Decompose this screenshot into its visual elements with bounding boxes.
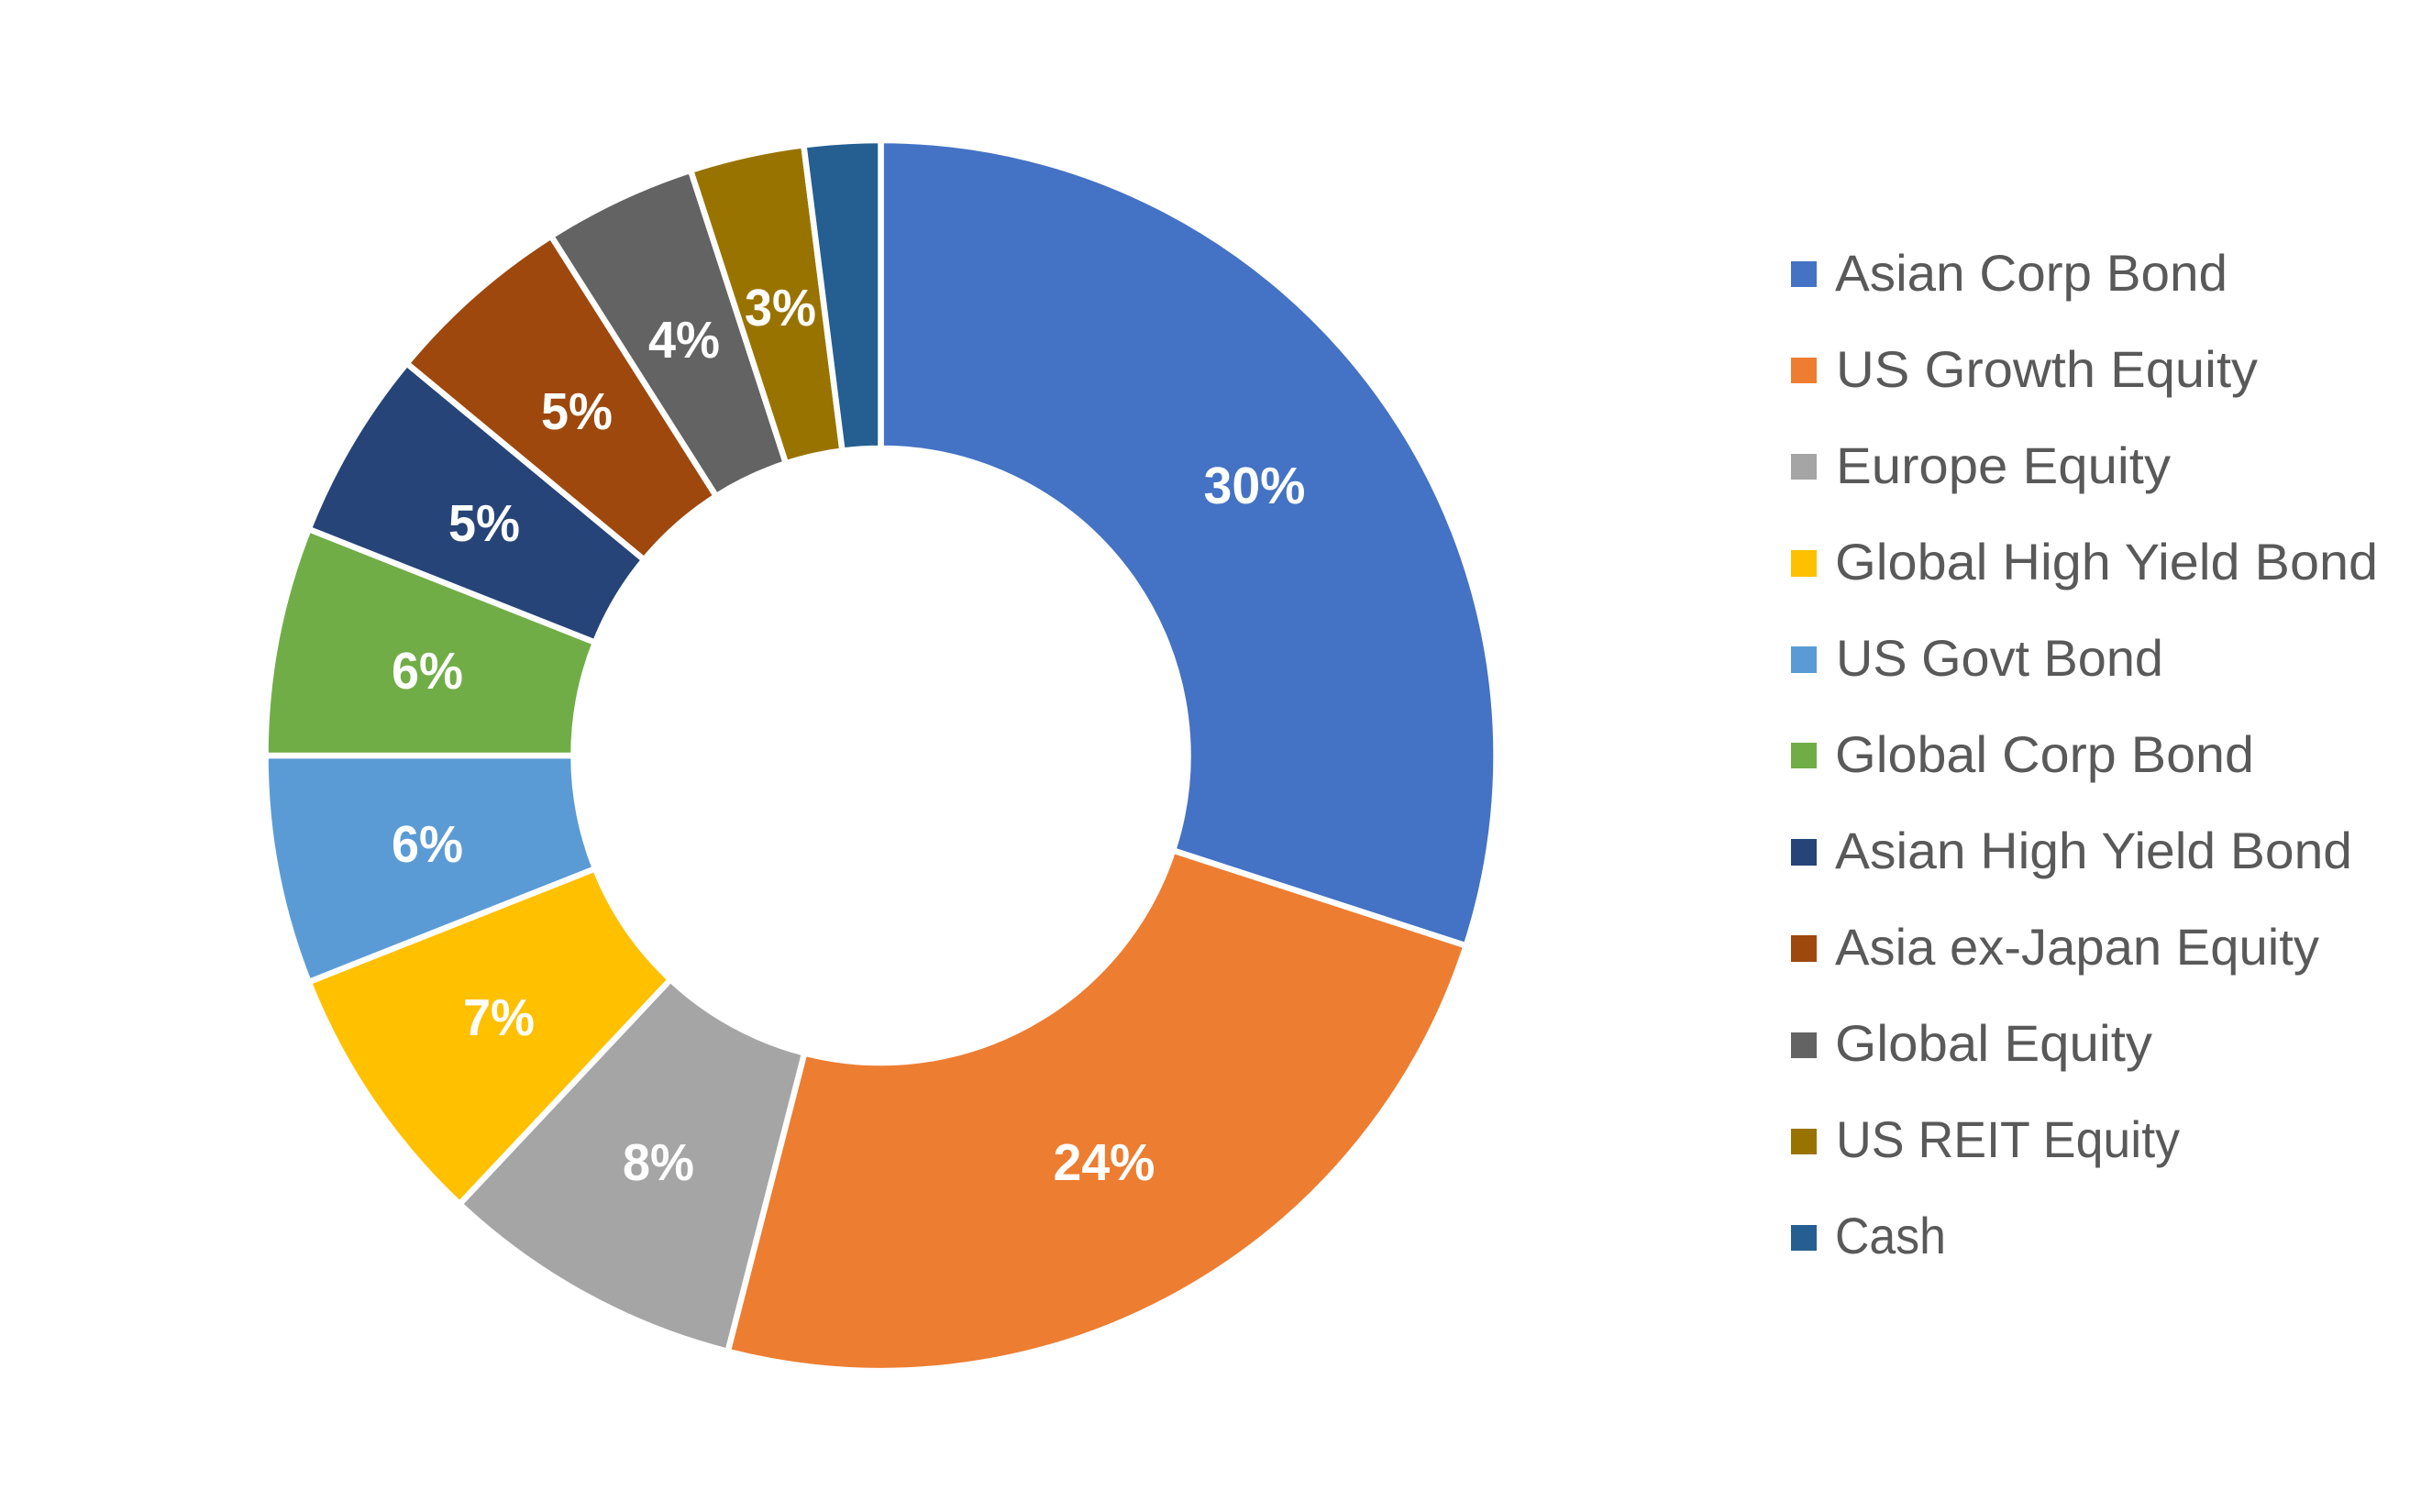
- legend item: US Govt Bond: US Govt Bond: [1836, 629, 2163, 687]
- value: 6% green: 6%: [392, 642, 463, 701]
- slice: US Govt Bond 6%: [266, 756, 595, 982]
- legend: [1791, 244, 2378, 1264]
- value: 3%: 3%: [745, 279, 816, 337]
- slice: Global Equity 4%: [551, 171, 786, 496]
- legend item: Global High Yield Bond: Global High Yield Bond: [1835, 533, 2378, 590]
- slice: US Growth Equity 24%: [728, 851, 1466, 1371]
- legend item: Cash: Cash: [1835, 1207, 1946, 1264]
- legend item: Asian High Yield Bond: Asian High Yield Bond: [1835, 822, 2352, 879]
- slice: US REIT Equity 3%: [691, 145, 842, 463]
- value: 6% blue: 6%: [392, 815, 463, 874]
- slice: Global High Yield Bond 7%: [309, 868, 670, 1204]
- slice: Asian Corp Bond 30%: [880, 140, 1497, 945]
- value: 4%: 4%: [648, 311, 720, 370]
- legend item: Global Equity: Global Equity: [1835, 1014, 2152, 1072]
- donut chart: [266, 140, 1497, 1371]
- slice: Global Corp Bond 6%: [266, 529, 595, 756]
- legend item: US Growth Equity: US Growth Equity: [1836, 340, 2258, 398]
- data labels: [392, 279, 1306, 1192]
- slice: Europe Equity 8%: [459, 979, 804, 1352]
- value: 8%: 8%: [623, 1133, 694, 1192]
- slice: Cash 2%: [803, 140, 880, 451]
- value: 5% brown: 5%: [541, 382, 613, 441]
- value: 5% navy: 5%: [448, 494, 520, 553]
- legend item: Asian Corp Bond: Asian Corp Bond: [1835, 244, 2228, 302]
- legend item: Cash: [1791, 1207, 1946, 1264]
- legend item: Asia ex-Japan Equity: Asia ex-Japan Equity: [1835, 918, 2319, 976]
- value: 30%: 30%: [1203, 457, 1306, 515]
- slice: Asia ex-Japan Equity 5%: [407, 237, 716, 559]
- legend item: Global Corp Bond: Global Corp Bond: [1835, 725, 2254, 783]
- legend item: US REIT Equity: US REIT Equity: [1836, 1110, 2180, 1168]
- slice: Asian High Yield Bond 5%: [309, 363, 644, 643]
- legend item: Europe Equity: Europe Equity: [1836, 436, 2171, 494]
- value: 7%: 7%: [463, 988, 535, 1047]
- value: 24%: 24%: [1053, 1133, 1155, 1192]
